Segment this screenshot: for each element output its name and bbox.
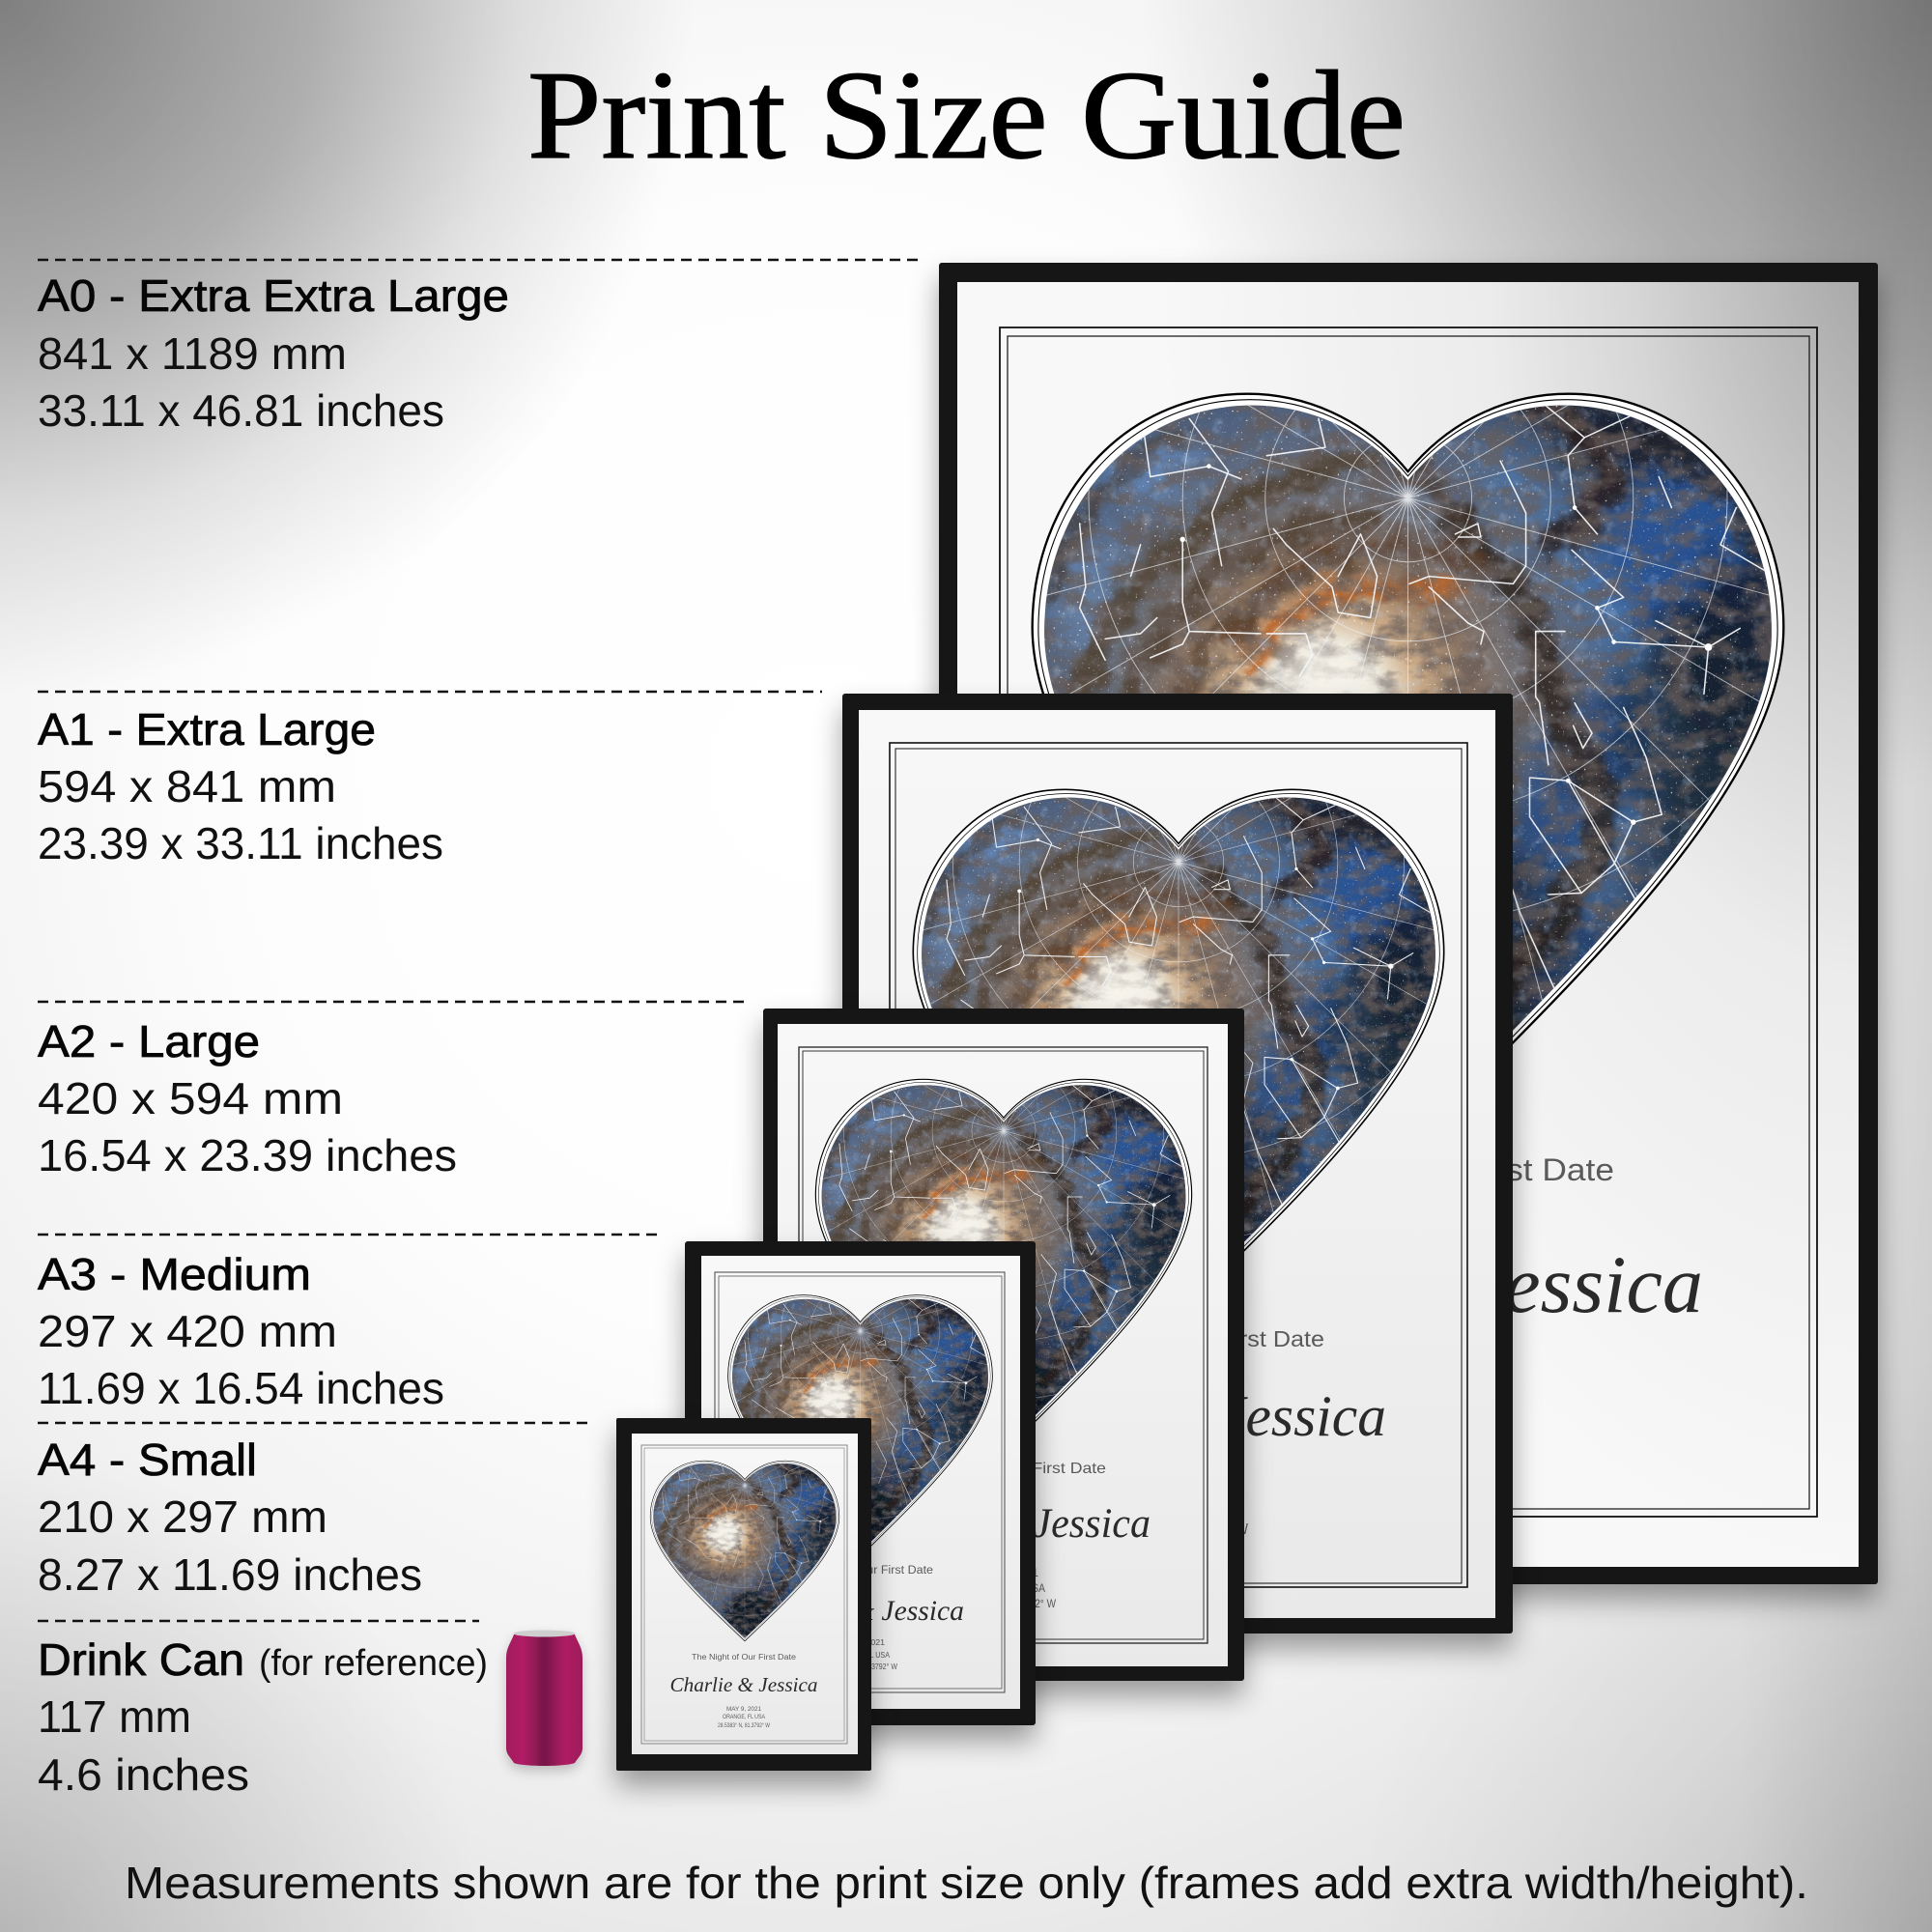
A4 caption: 28.5383° N, 81.3792° W	[718, 1723, 770, 1729]
A0 caption: The Night of Our First Date	[1205, 1152, 1614, 1187]
size label: drink can: 4.6 inches	[38, 1749, 249, 1800]
A2 caption: The Night of Our First Date	[901, 1461, 1106, 1477]
icon: drink can	[506, 1631, 582, 1766]
A1 caption: Charlie & Jessica	[971, 1384, 1386, 1448]
poster frame: A2	[568, 683, 1439, 1681]
A2 caption	[857, 1461, 1151, 1610]
size label: A4	[38, 1423, 590, 1600]
A4 caption: The Night of Our First Date	[692, 1653, 797, 1662]
A1 caption: 28.5383° N, 81.3792° W	[1109, 1521, 1249, 1538]
A0 caption	[1116, 1152, 1703, 1450]
size label: A3: 297 x 420 mm	[38, 1306, 337, 1356]
size label: A4: 8.27 x 11.69 inches	[38, 1549, 422, 1600]
poster frame: A1	[563, 231, 1794, 1634]
A2 double border	[799, 1047, 1208, 1643]
A1 mat board	[859, 710, 1495, 1618]
A2 caption: MAY 9, 2021	[969, 1568, 1038, 1579]
A1 caption: The Night of Our First Date	[1033, 1326, 1324, 1351]
A4 caption: MAY 9, 2021	[726, 1707, 762, 1713]
size label: A1: 594 x 841 mm	[38, 761, 336, 811]
size label: A0: A0 - Extra Extra Large	[38, 270, 509, 321]
A1 heart star map	[563, 231, 1794, 1493]
A3 double border	[715, 1272, 1005, 1692]
footer note: Measurements shown are for the print size only (frames add extra width/height).	[125, 1858, 1808, 1908]
A4 heart star map	[526, 1269, 964, 1702]
A2 heart star map	[568, 683, 1439, 1578]
title: Print Size Guide	[527, 45, 1406, 185]
size label: A1: 23.39 x 33.11 inches	[38, 818, 443, 868]
poster frame: A4	[526, 1269, 964, 1771]
size label: drink can: (for reference)	[259, 1643, 488, 1684]
size label: A4: 210 x 297 mm	[38, 1492, 327, 1542]
A1 double border	[890, 743, 1467, 1587]
A3 caption	[757, 1565, 964, 1671]
A0 caption: ORANGE, FL USA	[1324, 1393, 1495, 1418]
size label: A2: A2 - Large	[38, 1016, 260, 1066]
A3 caption: ORANGE, FL USA	[832, 1651, 891, 1660]
size label: A0: 33.11 x 46.81 inches	[38, 385, 444, 436]
size label: drink can: 117 mm	[38, 1691, 191, 1742]
A1 caption	[971, 1326, 1386, 1538]
A3 caption: MAY 9, 2021	[837, 1638, 886, 1647]
size label: A3: A3 - Medium	[38, 1249, 311, 1299]
size label: A1	[38, 692, 822, 868]
A4 caption: Charlie & Jessica	[670, 1673, 817, 1696]
A4 double border	[641, 1445, 847, 1744]
size label: drink can	[38, 1621, 488, 1800]
A4 mat board	[632, 1434, 858, 1754]
A3 mat board	[701, 1256, 1020, 1709]
size label: A2	[38, 1002, 744, 1180]
A2 mat board	[778, 1024, 1228, 1666]
A3 heart star map	[554, 1017, 1167, 1645]
A0 double border	[1000, 327, 1817, 1517]
A0 caption: Charlie & Jessica	[1116, 1239, 1703, 1330]
size label: A0: 841 x 1189 mm	[38, 328, 347, 379]
A3 caption: The Night of Our First Date	[788, 1565, 933, 1577]
A1 caption: MAY 9, 2021	[1130, 1484, 1227, 1500]
size label: A0	[38, 260, 924, 436]
size label: drink can: Drink Can	[38, 1634, 244, 1685]
size label: A3	[38, 1235, 664, 1413]
size label: A2: 420 x 594 mm	[38, 1073, 343, 1123]
poster frame: A3	[554, 1017, 1167, 1725]
A2 caption: ORANGE, FL USA	[962, 1583, 1045, 1595]
A0 caption: MAY 9, 2021	[1337, 1361, 1482, 1386]
A2 caption: 28.5383° N, 81.3792° W	[952, 1599, 1056, 1610]
A2 caption: Charlie & Jessica	[857, 1501, 1151, 1547]
size label: A2: 16.54 x 23.39 inches	[38, 1130, 457, 1180]
A3 caption: 28.5383° N, 81.3792° W	[824, 1662, 897, 1671]
A1 caption: ORANGE, FL USA	[1121, 1502, 1236, 1519]
size label: A4: A4 - Small	[38, 1435, 257, 1485]
poster frame: A0	[537, 0, 1932, 1584]
A4 caption: ORANGE, FL USA	[723, 1715, 765, 1720]
A4 caption	[670, 1653, 817, 1729]
A0 heart star map	[537, 0, 1932, 1403]
A0 mat board	[957, 282, 1859, 1567]
size label: A1: A1 - Extra Large	[38, 704, 376, 754]
A3 caption: Charlie & Jessica	[757, 1595, 964, 1627]
A0 caption: 28.5383° N, 81.3792° W	[1308, 1425, 1511, 1450]
size label: A3: 11.69 x 16.54 inches	[38, 1363, 444, 1413]
